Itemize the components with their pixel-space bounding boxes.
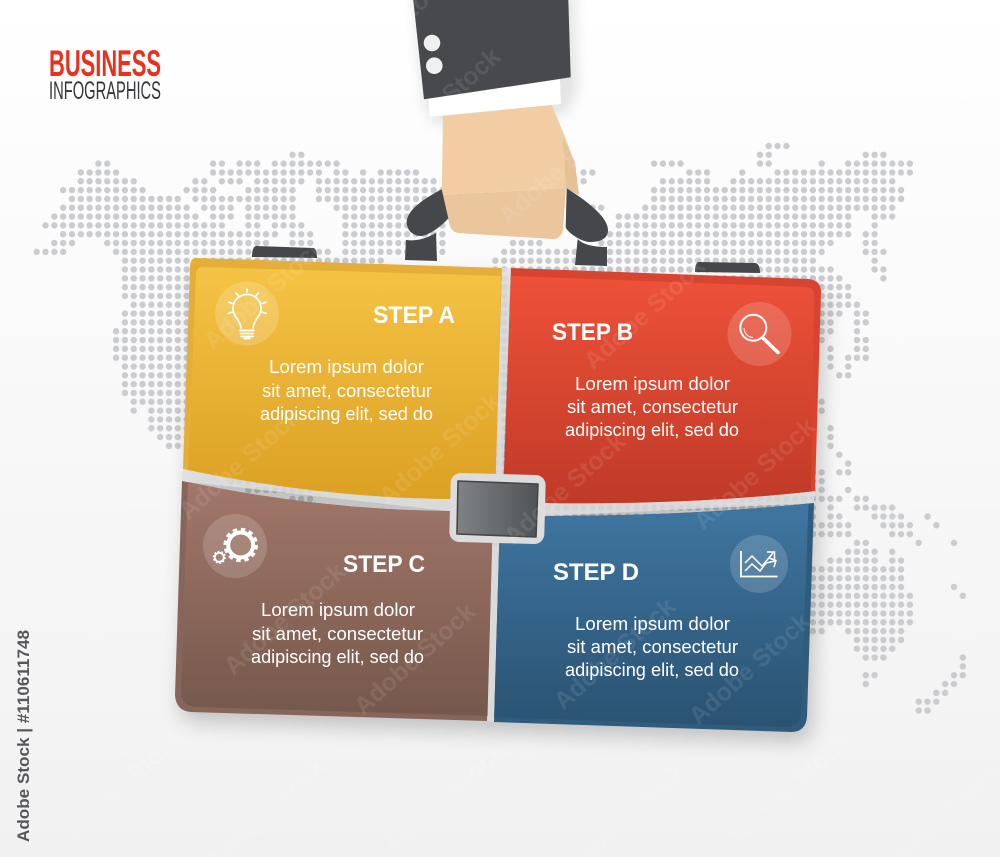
heading: step A: STEP A xyxy=(373,302,455,329)
stock watermark: Adobe Stock xyxy=(374,387,506,511)
heading: step B: STEP B xyxy=(552,319,633,346)
stock watermark: Adobe Stock xyxy=(349,597,481,721)
body: step B: adipiscing elit, sed do xyxy=(565,420,739,440)
title: INFOGRAPHICS xyxy=(49,77,161,105)
stock watermark: Adobe Stock xyxy=(24,77,156,201)
body: step D: adipiscing elit, sed do xyxy=(565,660,739,680)
panel: step D xyxy=(494,503,814,732)
sleeve shadow xyxy=(413,0,578,125)
body: step B: sit amet, consectetur xyxy=(567,397,738,417)
body: step C: Lorem ipsum dolor xyxy=(261,600,415,620)
top latch right xyxy=(695,262,760,273)
stock watermark: Adobe Stock xyxy=(19,587,151,711)
dotted world map xyxy=(37,146,963,710)
stock watermark: Adobe Stock xyxy=(494,107,626,231)
body: step B xyxy=(565,374,739,440)
briefcase xyxy=(175,246,826,742)
stock watermark: Adobe Stock xyxy=(859,422,991,546)
stock watermark: Adobe Stock xyxy=(549,592,681,716)
body: step B: Lorem ipsum dolor xyxy=(575,374,730,394)
title xyxy=(49,43,161,105)
stock watermark: Adobe Stock xyxy=(219,557,351,681)
stock watermark: Adobe Stock xyxy=(174,402,306,526)
hand and sleeve xyxy=(413,0,579,239)
body: step A: Lorem ipsum dolor xyxy=(269,357,424,377)
stock watermark: Adobe Stock xyxy=(199,232,331,356)
body: step C: sit amet, consectetur xyxy=(252,624,423,644)
stock id vertical text: Adobe Stock | #110611748 xyxy=(14,630,33,842)
left handle foot xyxy=(405,233,437,261)
right handle foot xyxy=(575,239,607,266)
stock watermark: Adobe Stock xyxy=(59,722,191,846)
shadow xyxy=(180,268,826,742)
stock watermark: Adobe Stock xyxy=(854,77,986,201)
heading: step C: STEP C xyxy=(343,551,425,578)
body: step C xyxy=(251,600,424,667)
stock watermark: Adobe Stock xyxy=(714,57,846,181)
top latch left xyxy=(252,246,317,258)
stock watermark: Adobe Stock xyxy=(689,412,821,536)
icon: line chart xyxy=(730,535,788,593)
hand xyxy=(442,105,579,239)
stock watermark: Adobe Stock xyxy=(579,252,711,376)
panel: step A xyxy=(183,258,502,499)
stock watermark: Adobe Stock xyxy=(684,607,816,731)
sleeve button xyxy=(426,57,443,74)
panel: step C xyxy=(175,481,493,721)
body: step C: adipiscing elit, sed do xyxy=(251,647,424,667)
icon: magnifier xyxy=(728,302,792,366)
stock watermark: Adobe Stock xyxy=(4,277,136,401)
title: BUSINESS xyxy=(49,43,161,84)
icon: gears xyxy=(203,514,267,578)
stock watermark: Adobe Stock xyxy=(374,42,506,166)
jacket sleeve xyxy=(413,0,571,99)
briefcase handle xyxy=(405,188,608,266)
body: step A: adipiscing elit, sed do xyxy=(260,404,433,424)
left handle arm xyxy=(407,189,448,236)
body: step A: sit amet, consectetur xyxy=(262,381,432,401)
stock watermark: Adobe Stock xyxy=(724,727,856,851)
body: step D: sit amet, consectetur xyxy=(567,637,738,657)
panel: step B xyxy=(503,268,821,503)
icon: light bulb xyxy=(215,282,279,346)
body: step D: Lorem ipsum dolor xyxy=(575,614,730,634)
stock watermark: Adobe Stock xyxy=(29,412,161,536)
sleeve button xyxy=(424,35,440,51)
body: step A xyxy=(260,357,433,424)
clasp xyxy=(449,473,546,544)
gap backing xyxy=(182,268,815,722)
body: step D xyxy=(565,614,739,680)
stock watermark: Adobe Stock xyxy=(379,737,511,857)
right handle arm xyxy=(566,188,608,242)
shirt cuff xyxy=(428,79,561,117)
heading: step D: STEP D xyxy=(553,559,639,586)
stock watermark: Adobe Stock xyxy=(499,427,631,551)
